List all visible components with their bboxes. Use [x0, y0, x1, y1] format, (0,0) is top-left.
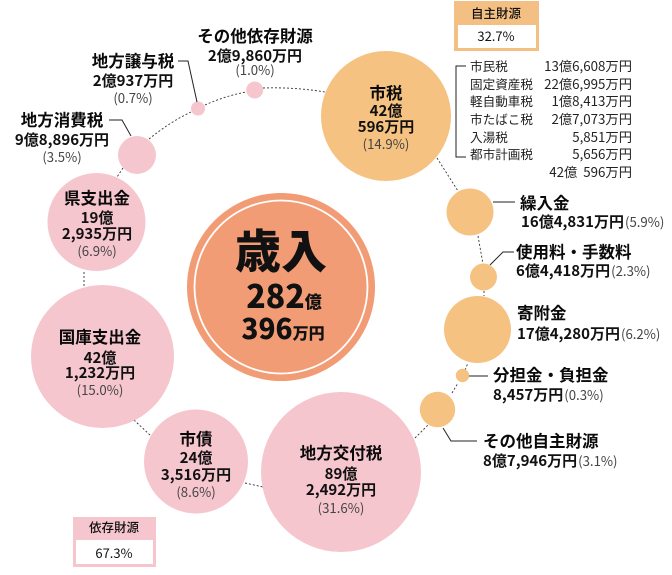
center circle: revenue total: 396万円: [241, 308, 325, 348]
legend: dependent revenue: 67.3%: [95, 543, 133, 562]
circle: local transfer tax: 地方譲与税: [92, 48, 175, 72]
circle: other dependent revenue: (1.0%): [235, 60, 275, 79]
circle: municipal bonds: 市債: [180, 426, 212, 450]
circle: municipal bonds: 3,516万円: [161, 464, 231, 485]
circle: national subsidies: [31, 285, 174, 428]
circle: other own revenue: 8億7,946万円(3.1%): [483, 450, 618, 471]
circle: other own revenue: [420, 392, 618, 471]
circle: municipal bonds: (8.6%): [176, 482, 216, 501]
city tax breakdown: 2億7,073万円: [552, 109, 632, 128]
circle: prefectural subsidies: 2,935万円: [62, 223, 132, 244]
city tax breakdown: 入湯税: [470, 127, 508, 146]
circle: local transfer tax: 2億937万円: [93, 70, 173, 91]
legend: own revenue: 32.7%: [477, 26, 515, 45]
circle: donations: 17億4,280万円(6.2%): [517, 323, 660, 344]
city tax breakdown: 軽自動車税: [470, 91, 533, 110]
circle: usage fees: [470, 239, 651, 290]
circle: local consumption tax: (3.5%): [42, 147, 82, 166]
circle: city tax: 596万円: [358, 116, 414, 137]
circle: other own revenue: その他自主財源: [483, 428, 599, 452]
center circle: revenue total: 歳入: [235, 216, 327, 282]
circle: local consumption tax: [15, 107, 156, 174]
circle: municipal bonds: [144, 410, 248, 514]
legend: dependent revenue: 依存財源: [89, 517, 139, 536]
circle: local transfer tax: (0.7%): [113, 88, 153, 107]
center circle: revenue total: 282億: [246, 272, 322, 318]
city tax breakdown: 5,656万円: [572, 144, 632, 163]
circle: transfers: [446, 188, 664, 236]
city tax breakdown: 42億 596万円: [549, 162, 632, 181]
city tax breakdown: [456, 56, 632, 181]
circle: transfers: 16億4,831万円(5.9%): [521, 211, 664, 232]
legend: dependent revenue: [73, 517, 156, 567]
circle: other dependent revenue: [197, 23, 313, 98]
city tax breakdown: 13億6,608万円: [544, 56, 632, 75]
circle: national subsidies: (15.0%): [77, 380, 123, 399]
legend: own revenue: [454, 1, 539, 51]
circle: donations: 寄附金: [517, 300, 567, 324]
circle: contributions: 分担金・負担金: [493, 362, 609, 386]
circle: city tax: (14.9%): [363, 134, 409, 153]
city tax breakdown: 22億6,995万円: [544, 74, 632, 93]
circle: city tax: [321, 51, 451, 181]
circle: other dependent revenue: 2億9,860万円: [208, 45, 302, 66]
circle: city tax: 42億: [370, 100, 402, 121]
circle: national subsidies: 国庫支出金: [59, 324, 142, 348]
circle: prefectural subsidies: 19億: [81, 207, 113, 228]
city tax breakdown: 5,851万円: [572, 127, 632, 146]
circle: national subsidies: 1,232万円: [65, 362, 135, 383]
circle: local allocation tax: 2,492万円: [306, 479, 376, 500]
circle: contributions: [456, 362, 609, 405]
circle: local transfer tax: [92, 48, 205, 116]
circle: local consumption tax: 9億8,896万円: [15, 129, 109, 150]
circle: national subsidies: 42億: [84, 347, 116, 368]
circle: donations: [444, 296, 660, 363]
circle: city tax: 市税: [370, 80, 403, 104]
circle: usage fees: 6億4,418万円(2.3%): [516, 260, 651, 281]
circle: contributions: 8,457万円(0.3%): [493, 384, 604, 405]
city tax breakdown: 市民税: [470, 56, 508, 75]
circle: local consumption tax: 地方消費税: [21, 107, 104, 131]
circle: prefectural subsidies: 県支出金: [64, 185, 130, 209]
legend: own revenue: 自主財源: [471, 3, 521, 22]
circle: municipal bonds: 24億: [180, 447, 212, 468]
circle: prefectural subsidies: [48, 173, 146, 271]
circle: local allocation tax: (31.6%): [318, 498, 364, 517]
city tax breakdown: 市たばこ税: [470, 109, 533, 128]
city tax breakdown: 1億8,413万円: [552, 91, 632, 110]
circle: local allocation tax: 地方交付税: [300, 440, 383, 464]
city tax breakdown: 都市計画税: [470, 144, 533, 163]
circle: usage fees: 使用料・手数料: [516, 239, 632, 263]
city tax breakdown: 固定資産税: [470, 74, 533, 93]
center circle: revenue total: [187, 193, 375, 381]
circle: other dependent revenue: その他依存財源: [197, 23, 313, 47]
circle: local allocation tax: 89億: [325, 463, 357, 484]
circle: prefectural subsidies: (6.9%): [77, 241, 117, 260]
circle: local allocation tax: [261, 392, 421, 552]
circle: transfers: 繰入金: [520, 190, 570, 214]
